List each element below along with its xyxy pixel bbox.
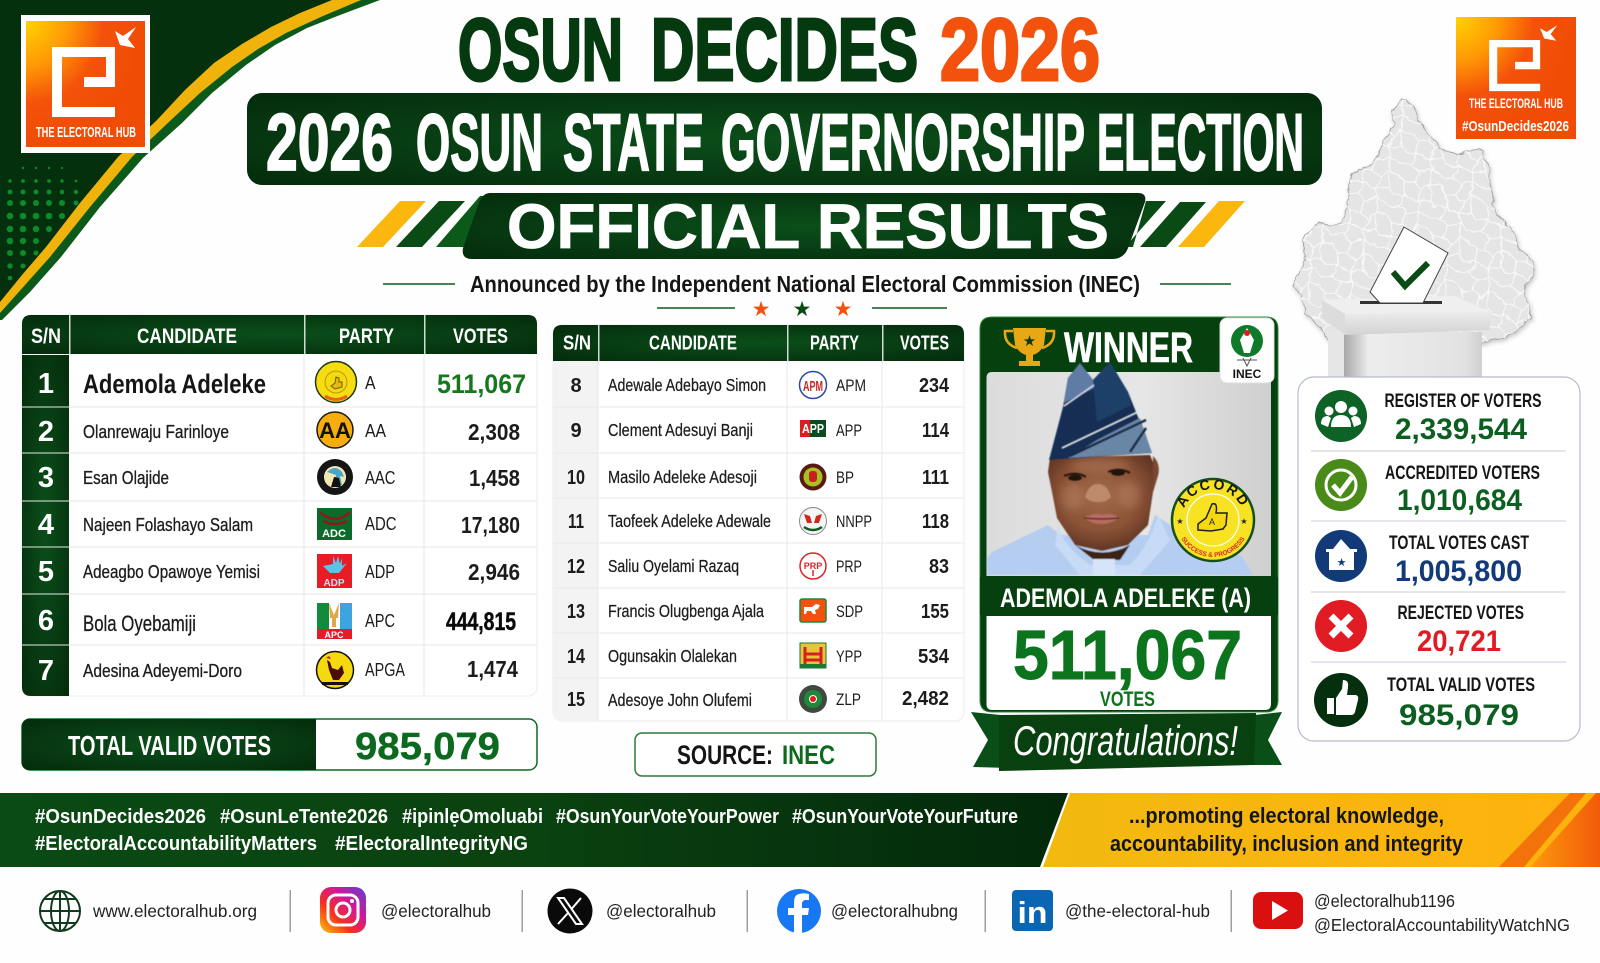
row 15: Adesoye John Olufemi [608, 690, 752, 710]
table 2 header: CANDIDATE [649, 332, 737, 354]
stat: accredited voters: ACCREDITED VOTERS [1385, 463, 1540, 484]
row 13: SDP [836, 602, 863, 621]
row 1: A [365, 373, 376, 393]
source box: SOURCE: [677, 740, 773, 770]
row 12 [567, 553, 949, 579]
row 2: AA [319, 418, 351, 443]
corner swoosh decoration [0, 0, 380, 320]
row 13: 155 [921, 601, 949, 623]
row 10: BP [836, 468, 854, 487]
hashtag band: #OsunYourVoteYourFuture [792, 806, 1018, 828]
map of Osun state [1293, 99, 1533, 343]
panel: election statistics [1298, 377, 1580, 741]
results table: candidates 8 to 15 [553, 325, 964, 721]
social: facebook: @electoralhubng [831, 901, 958, 921]
row 7: 1,474 [467, 656, 518, 682]
social: instagram [320, 887, 491, 933]
logo: The Electoral Hub (right): #OsunDecides2026 [1462, 118, 1569, 135]
row 9: APP [802, 421, 824, 436]
three stars divider: ★ [793, 298, 811, 321]
table 2 header: S/N [563, 332, 591, 354]
row 3 [38, 459, 520, 495]
table 1 header: VOTES [453, 325, 508, 348]
row 7 [38, 652, 518, 688]
row 10: Masilo Adeleke Adesoji [608, 467, 757, 487]
row 12: Saliu Oyelami Razaq [608, 556, 739, 576]
INEC badge [1220, 318, 1274, 383]
logo: The Electoral Hub (right) [1456, 17, 1576, 139]
stat: total votes cast: ★ [1337, 557, 1347, 569]
three stars divider: ★ [752, 298, 770, 321]
row 3: 3 [38, 462, 54, 494]
serial number column [22, 355, 69, 696]
winner votes: VOTES [1100, 688, 1155, 711]
row 7: Adesina Adeyemi-Doro [83, 660, 242, 681]
Accord party badge [1170, 478, 1256, 562]
row 3: Esan Olajide [83, 467, 169, 488]
row 12: 12 [567, 556, 585, 578]
Accord party badge: ACCORD [1178, 480, 1248, 508]
row 6 [38, 603, 516, 640]
stat: total valid votes [1314, 673, 1535, 732]
title: Osun Decides 2026: DECIDES [651, 0, 918, 99]
social: linkedin: in [1018, 895, 1048, 930]
hashtag band: #OsunYourVoteYourPower [556, 806, 779, 828]
row 2 [38, 412, 520, 448]
row 8: APM [803, 378, 823, 395]
heading bar: 2026 Osun State Governorship Election [247, 93, 1322, 188]
row 5 [38, 554, 520, 589]
row 10: 10 [567, 467, 585, 489]
ballot box with ballot paper [1322, 227, 1490, 378]
table 2 header: VOTES [900, 332, 949, 354]
row 13 [567, 599, 949, 623]
hashtag band: #OsunDecides2026 [35, 806, 206, 828]
row 14: 14 [567, 646, 586, 668]
row 5: Adeagbo Opawoye Yemisi [83, 561, 260, 582]
row 2: 2 [38, 416, 54, 448]
row 3: 1,458 [469, 465, 520, 491]
Accord party badge: ★ [1176, 517, 1184, 526]
stat: register of voters [1315, 390, 1542, 446]
row 12: 83 [929, 556, 949, 578]
Accord party badge: SUCCESS & PROGRESS [1182, 537, 1244, 557]
total valid votes bar [22, 719, 537, 770]
row 7: APGA [365, 660, 405, 680]
row 10: 111 [922, 467, 949, 489]
stat: total votes cast: TOTAL VOTES CAST [1389, 533, 1529, 554]
hashtag band: #ElectoralAccountabilityMatters [35, 833, 317, 855]
row 11 [568, 508, 949, 534]
stat: total votes cast [1315, 530, 1529, 588]
stat: total valid votes: TOTAL VALID VOTES [1387, 675, 1535, 696]
trophy icon: ★ [1023, 333, 1036, 350]
congratulations ribbon [971, 712, 1282, 771]
social: website [40, 891, 257, 931]
row 6: Bola Oyebamiji [83, 611, 196, 636]
social: x [548, 888, 716, 934]
row 14 [567, 643, 950, 668]
row 5: ADP [365, 562, 395, 582]
row 2: Olanrewaju Farinloye [83, 421, 229, 442]
row 7: 7 [38, 655, 54, 687]
row 11: NNPP [836, 512, 872, 531]
row 12: PRP [804, 561, 822, 571]
hashtag band [0, 793, 1068, 867]
row 10 [567, 464, 949, 490]
congratulations ribbon: Congratulations! [1013, 717, 1238, 764]
row 11: Taofeek Adeleke Adewale [608, 511, 771, 531]
stat: rejected votes: 20,721 [1417, 625, 1501, 658]
row 14: YPP [836, 647, 862, 666]
row 9: APP [836, 421, 862, 440]
row 9: 114 [922, 420, 950, 442]
table 2 header: PARTY [810, 332, 859, 354]
table 1 header: S/N [31, 325, 61, 348]
stat: total valid votes: 985,079 [1399, 699, 1519, 732]
title: Osun Decides 2026 [458, 0, 1100, 99]
stat: total votes cast: 1,005,800 [1395, 555, 1522, 588]
three stars divider [657, 298, 947, 321]
row 8: Adewale Adebayo Simon [608, 375, 766, 395]
subtitle: announced by INEC: Announced by the Independent National Electoral Commission (INEC) [470, 271, 1140, 297]
row 4: Najeen Folashayo Salam [83, 514, 253, 535]
row 1: Ademola Adeleke [83, 369, 266, 399]
row 1: 1 [38, 368, 54, 400]
row 13: 13 [567, 601, 585, 623]
row 4: 4 [38, 509, 54, 541]
tagline band: accountability, inclusion and integrity [1110, 831, 1464, 856]
logo: The Electoral Hub (left) [21, 15, 150, 153]
table 1 header [22, 315, 537, 354]
INEC badge: INEC [1233, 367, 1262, 381]
hashtag band: #ElectoralIntegrityNG [335, 833, 528, 855]
social: youtube: @electoralhub1196 [1314, 891, 1455, 911]
winner card: WINNER [1064, 324, 1193, 372]
row 6: APC [324, 630, 344, 640]
row 14: 534 [918, 646, 950, 668]
three stars divider: ★ [834, 298, 852, 321]
row 4: ADC [322, 528, 346, 540]
table 2 header [553, 325, 964, 361]
row 15: ZLP [836, 690, 861, 709]
stat: accredited voters [1315, 459, 1540, 517]
Accord party badge: A [1209, 517, 1215, 527]
row 4 [38, 508, 520, 541]
table 1 header: CANDIDATE [137, 325, 237, 348]
row 13: Francis Olugbenga Ajala [608, 601, 764, 621]
total valid votes bar: TOTAL VALID VOTES [68, 730, 271, 761]
social: x: @electoralhub [606, 901, 716, 921]
row 1: 511,067 [437, 369, 526, 399]
tagline band: ...promoting electoral knowledge, [1129, 803, 1444, 828]
social: youtube: @ElectoralAccountabilityWatchNG [1314, 915, 1570, 935]
row 4: 17,180 [461, 512, 520, 538]
row 6: APC [365, 611, 395, 631]
row 1 [38, 362, 526, 402]
hashtag band: #OsunLeTente2026 [220, 806, 388, 828]
heading bar: 2026 Osun State Governorship Election: GOVERNORSHIP [721, 98, 1085, 188]
winner name band: ADEMOLA ADELEKE (A) [1000, 583, 1251, 613]
row 12: PRP [836, 557, 862, 576]
row 9 [570, 420, 950, 442]
row 5: 5 [38, 556, 54, 588]
social: linkedin: @the-electoral-hub [1065, 901, 1210, 921]
row 15 [567, 685, 949, 713]
table 1 header: PARTY [339, 325, 394, 348]
row 11: 118 [922, 511, 949, 533]
social: youtube [1253, 891, 1570, 935]
banner: Official Results: OFFICIAL RESULTS [507, 192, 1109, 262]
row 15: 15 [567, 689, 585, 711]
row 5: ADP [323, 578, 345, 589]
stat: accredited voters: 1,010,684 [1397, 484, 1522, 517]
social: facebook [777, 889, 958, 933]
row 2: 2,308 [468, 419, 520, 445]
stat: rejected votes [1315, 600, 1524, 658]
row 11: 11 [568, 511, 584, 533]
heading bar: 2026 Osun State Governorship Election: OSUN [416, 98, 543, 188]
social: instagram: @electoralhub [381, 901, 491, 921]
tagline band [1043, 793, 1600, 867]
row 9: Clement Adesuyi Banji [608, 420, 753, 440]
row 8 [570, 372, 950, 398]
winner photo panel [986, 362, 1271, 576]
social: linkedin [1012, 890, 1210, 931]
winner name band [980, 577, 1278, 615]
winner card [980, 316, 1278, 712]
winner votes: 511,067 [1013, 616, 1242, 694]
logo: The Electoral Hub (left): THE ELECTORAL HUB [36, 124, 136, 141]
total valid votes bar: 985,079 [355, 726, 500, 768]
row 15: 2,482 [902, 688, 949, 710]
results table: candidates 1 to 7 [22, 315, 537, 696]
row 8: 8 [570, 375, 582, 397]
banner: Official Results [357, 192, 1245, 262]
row 5: 2,946 [468, 559, 520, 585]
stat: register of voters: REGISTER OF VOTERS [1384, 391, 1542, 412]
row 14: Ogunsakin Olalekan [608, 646, 737, 666]
row 9: 9 [570, 420, 582, 442]
stat: rejected votes: REJECTED VOTES [1398, 603, 1524, 624]
title: Osun Decides 2026: OSUN [458, 0, 623, 99]
title: Osun Decides 2026: 2026 [940, 0, 1100, 99]
stat: register of voters: 2,339,544 [1395, 413, 1527, 446]
row 8: APM [836, 376, 866, 395]
trophy icon [1005, 328, 1054, 366]
source box: INEC [782, 740, 835, 770]
heading bar: 2026 Osun State Governorship Election: STATE [563, 98, 704, 188]
row 4: ADC [365, 514, 396, 534]
row 2: AA [365, 421, 386, 441]
halftone dots [7, 167, 79, 280]
hashtag band: #ipinlẹOmoluabi [402, 806, 543, 828]
Accord party badge: ★ [1240, 517, 1248, 526]
source box [635, 733, 876, 776]
row 8: 234 [919, 375, 950, 397]
social: website: www.electoralhub.org [92, 901, 257, 921]
row 6: 6 [38, 605, 54, 637]
row 3: AAC [365, 468, 396, 488]
heading bar: 2026 Osun State Governorship Election: 2026 [266, 98, 393, 188]
row 6: 444,815 [446, 608, 516, 636]
heading bar: 2026 Osun State Governorship Election: ELECTION [1097, 98, 1304, 188]
